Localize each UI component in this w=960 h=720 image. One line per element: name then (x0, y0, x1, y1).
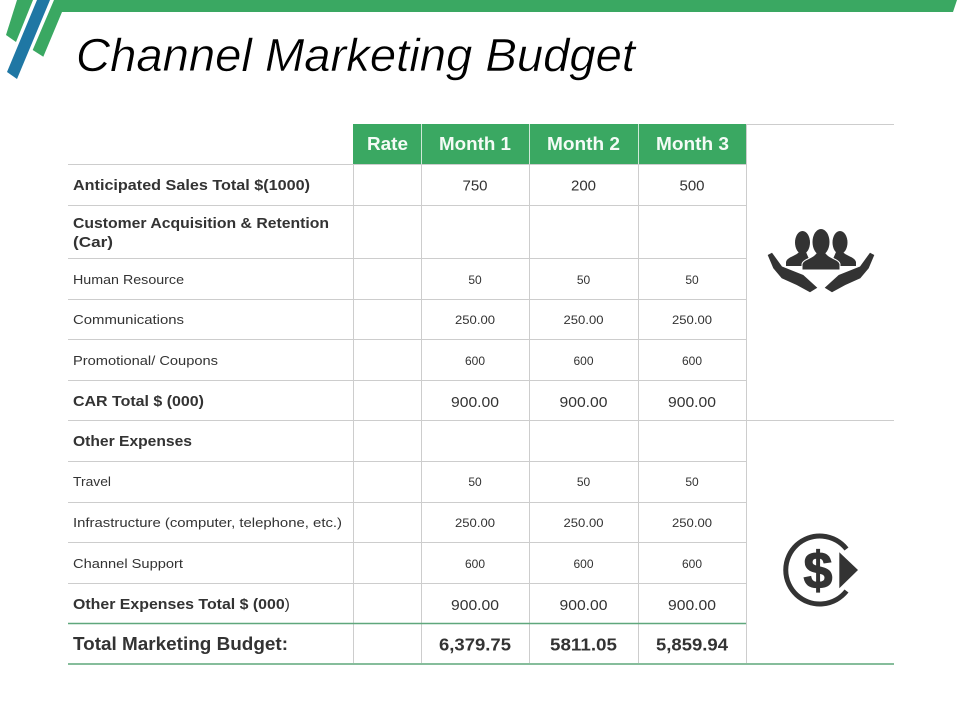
row: other expenses total: 900.00 (560, 597, 608, 614)
table header: Rate (367, 134, 408, 154)
row: human resource: 50 (468, 273, 482, 287)
row: human resource: 50 (685, 273, 699, 287)
row: travel: 50 (685, 475, 699, 489)
row: promotional coupons: 600 (573, 354, 594, 368)
row: human resource: Human Resource (73, 272, 184, 287)
table header (353, 124, 746, 164)
row: channel support: Channel Support (73, 556, 183, 571)
row: infrastructure: 250.00 (455, 516, 495, 530)
row: total marketing budget (73, 634, 728, 654)
row: total marketing budget: 5811.05 (550, 634, 617, 654)
row: anticipated sales (73, 177, 705, 194)
row: travel (73, 474, 699, 489)
row: other expenses total: 900.00 (668, 597, 716, 614)
row: anticipated sales: 750 (462, 178, 488, 194)
row: other expenses total: 900.00 (451, 597, 499, 614)
top decorative banner (6, 0, 957, 79)
row: anticipated sales: Anticipated Sales Total $(1000) (73, 177, 310, 194)
row: customer acquisition heading: Customer Acquisition & Retention (73, 215, 329, 232)
row: CAR total: CAR Total $ (000) (73, 393, 204, 410)
row: customer acquisition heading: (Car) (73, 234, 113, 251)
table (68, 124, 894, 664)
row: anticipated sales: 200 (571, 178, 596, 194)
row: travel: Travel (73, 474, 111, 489)
row: other expenses total (73, 596, 716, 614)
row: infrastructure: Infrastructure (computer, telephone, etc.) (73, 515, 342, 530)
row: infrastructure: 250.00 (564, 516, 604, 530)
row: promotional coupons: 600 (682, 354, 702, 368)
row: promotional coupons: 600 (465, 354, 485, 368)
row: CAR total: 900.00 (668, 394, 716, 411)
row: communications: 250.00 (455, 313, 495, 327)
row: customer acquisition heading (73, 215, 329, 251)
row: anticipated sales: 500 (679, 178, 705, 194)
row: human resource: 50 (577, 273, 590, 287)
table grid lines (68, 124, 894, 664)
row: travel: 50 (577, 475, 590, 489)
row: infrastructure: 250.00 (672, 516, 712, 530)
row: other expenses total: Other Expenses Total $ (000 ) (73, 596, 290, 613)
table header: Month 2 (547, 134, 620, 154)
row: communications (73, 312, 712, 327)
icon: people in hands (768, 229, 874, 292)
row: communications: 250.00 (564, 313, 604, 327)
row: CAR total: 900.00 (451, 394, 499, 411)
row: channel support: 600 (573, 557, 594, 571)
row: channel support (73, 556, 702, 571)
icon: dollar with arrow: $ (804, 542, 833, 600)
table header: Month 1 (439, 134, 511, 154)
row: CAR total: 900.00 (560, 394, 608, 411)
row: total marketing budget: Total Marketing Budget: (73, 634, 288, 654)
row: promotional coupons: Promotional/ Coupons (73, 353, 219, 368)
row: human resource (73, 272, 699, 287)
row: channel support: 600 (682, 557, 702, 571)
table header: Month 3 (656, 134, 729, 154)
row: channel support: 600 (465, 557, 485, 571)
row: total marketing budget: 5,859.94 (656, 634, 728, 654)
title: Channel Marketing Budget (76, 29, 637, 81)
icon: dollar with arrow (786, 536, 858, 604)
row: infrastructure (73, 515, 712, 530)
row: communications: Communications (73, 312, 185, 327)
row: travel: 50 (468, 475, 482, 489)
row: CAR total (73, 393, 716, 411)
row: promotional coupons (73, 353, 702, 368)
row: communications: 250.00 (672, 313, 712, 327)
row: total marketing budget: 6,379.75 (439, 634, 511, 654)
row: other expenses heading: Other Expenses (73, 433, 192, 450)
